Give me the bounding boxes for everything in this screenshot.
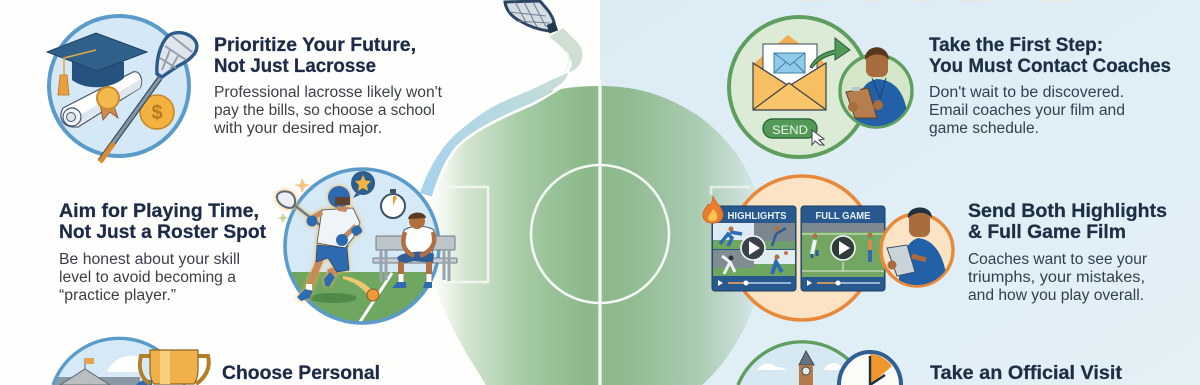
body text: Be honest about your skill <box>59 251 240 268</box>
panel: prioritize your future <box>47 16 443 162</box>
body text: game schedule. <box>929 120 1039 137</box>
field markings <box>440 80 750 385</box>
video: highlights: HIGHLIGHTS <box>728 211 787 222</box>
heading: Prioritize Your Future, <box>214 34 416 56</box>
heading: Aim for Playing Time, <box>59 200 259 222</box>
panel: playing time <box>59 169 457 332</box>
body text: Coaches want to see your <box>968 251 1147 268</box>
heading <box>214 34 416 77</box>
lacrosse field <box>428 80 767 385</box>
background: left white half <box>0 0 600 385</box>
heading: Take an Official Visit <box>930 362 1123 384</box>
icon: film circle <box>730 176 874 320</box>
video: full game <box>801 206 885 291</box>
star badge <box>351 171 375 198</box>
top edge remnants <box>800 0 1072 1</box>
body text: Professional lacrosse likely won't <box>214 84 443 101</box>
stopwatch <box>381 189 405 218</box>
body text: Don't wait to be discovered. <box>929 84 1124 101</box>
sparkle <box>277 178 311 223</box>
icon: graduation, diploma and stick: $ <box>151 102 163 124</box>
icon: coach with tablet <box>881 207 953 290</box>
body text: level to avoid becoming a <box>59 269 236 286</box>
heading: Send Both Highlights <box>968 200 1167 222</box>
body text <box>213 84 443 137</box>
icon: coach with clipboard <box>840 47 912 128</box>
icon: graduation, diploma and stick <box>47 16 197 162</box>
panel: highlights and full game <box>703 176 1167 320</box>
body text: Email coaches your film and <box>929 102 1125 119</box>
panel: official visit <box>738 342 1123 385</box>
video: highlights <box>712 206 796 291</box>
video: full game: FULL GAME <box>816 211 871 222</box>
panel: choose personal <box>50 338 380 385</box>
body text <box>59 251 240 304</box>
heading <box>968 200 1167 243</box>
body text: with your desired major. <box>213 120 382 137</box>
body text <box>968 251 1147 304</box>
curved path from lacrosse stick <box>420 28 582 197</box>
icon: email and send: SEND <box>772 123 808 137</box>
icon: clock tower and clock <box>738 342 901 385</box>
body text <box>929 84 1125 137</box>
heading: Choose Personal <box>222 362 380 384</box>
panel: contact coaches <box>729 17 1171 157</box>
body text: “practice player.” <box>59 287 176 304</box>
heading: You Must Contact Coaches <box>929 55 1171 77</box>
heading: & Full Game Film <box>968 221 1126 243</box>
background: right blue half <box>600 0 1200 385</box>
icon: player and bench <box>277 169 457 332</box>
icon: campus and trophy <box>50 338 209 385</box>
heading: Not Just a Roster Spot <box>59 221 266 243</box>
body text: triumphs, your mistakes, <box>968 269 1145 286</box>
heading <box>59 200 266 243</box>
heading: Take the First Step: <box>929 34 1103 56</box>
ball <box>343 276 379 301</box>
heading <box>929 34 1171 77</box>
bench and sitting player <box>373 212 457 288</box>
heading: Not Just Lacrosse <box>214 55 376 77</box>
body text: and how you play overall. <box>968 287 1144 304</box>
body text: pay the bills, so choose a school <box>214 102 435 119</box>
running player <box>277 186 363 301</box>
icon: flame <box>703 196 723 223</box>
icon: email and send <box>729 17 869 157</box>
icon: lacrosse stick head at top <box>505 1 558 33</box>
